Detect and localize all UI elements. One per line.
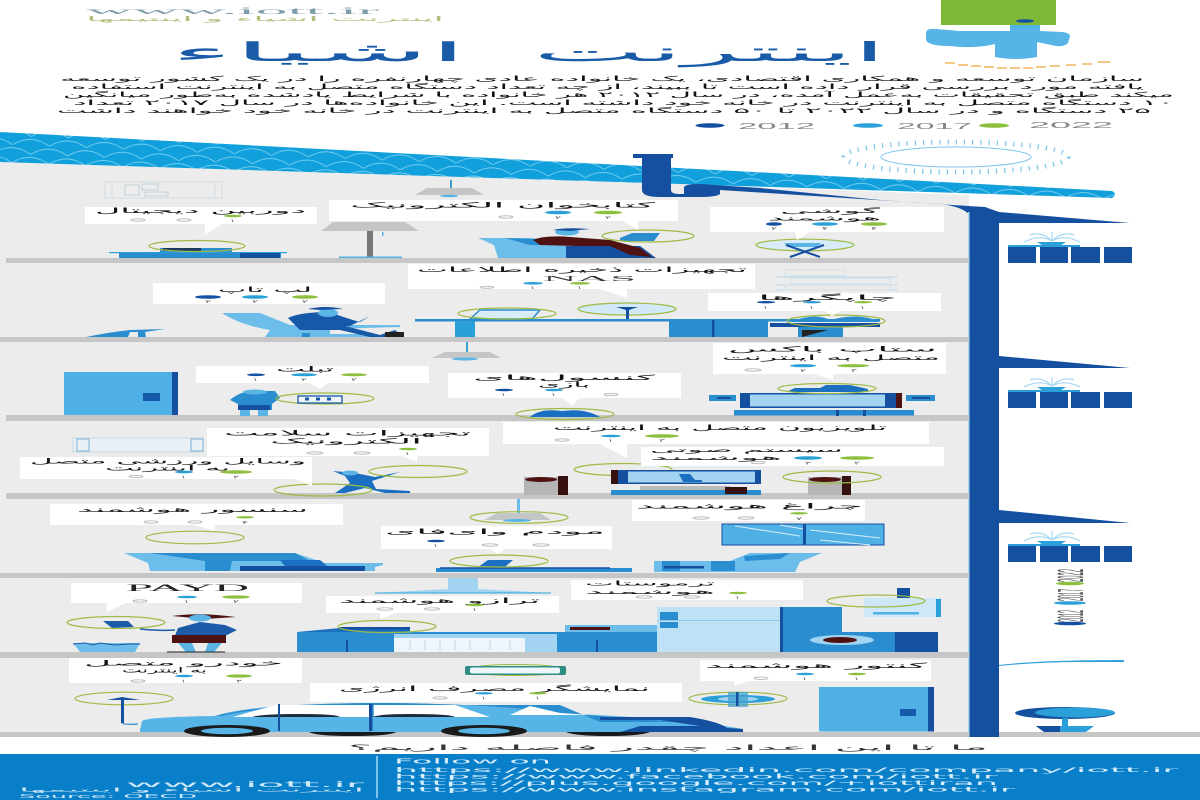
callout: e-health devices bbox=[207, 428, 489, 462]
legend: years bbox=[696, 121, 1116, 131]
callout: tablet: تبلت bbox=[276, 364, 334, 374]
callout: connected sports devices: به اینترنت bbox=[105, 464, 230, 472]
callout: digital camera bbox=[85, 206, 317, 235]
callout: energy consumption display: ۱ bbox=[481, 696, 486, 702]
callout: smart meter: ۱ bbox=[854, 677, 859, 682]
callout: smart audio system: سیستم صوتی bbox=[650, 446, 843, 454]
callout: connected sports devices: وسایل ورزشی متصل bbox=[30, 456, 306, 466]
callout: smartphone: گوشی bbox=[780, 207, 885, 215]
vertical legend: 2012 bbox=[1050, 610, 1091, 622]
callout: smart audio system: ۲ bbox=[805, 462, 812, 466]
callout: game consoles bbox=[448, 373, 681, 405]
callout: set-top box: ۳ bbox=[851, 368, 858, 374]
callout: smartphone: هوشمند bbox=[768, 214, 884, 222]
icon: EV charger bbox=[75, 692, 173, 724]
callout: smart meter bbox=[700, 660, 931, 686]
callout: e-book reader: ۲ bbox=[555, 216, 562, 221]
footer: social links bbox=[394, 758, 1180, 794]
callout: game consoles: ۱ bbox=[551, 393, 556, 398]
callout: smart scale bbox=[326, 596, 559, 619]
callout: PAYD: PAYD bbox=[126, 583, 252, 593]
callout: digital camera: دوربین دیجیتال bbox=[95, 206, 306, 215]
callout: tablet: ۲ bbox=[301, 378, 308, 383]
icon: woman with phone bbox=[67, 614, 237, 652]
legend: years: 2017 bbox=[897, 122, 974, 131]
callout: smart audio system bbox=[641, 446, 944, 466]
vertical legend bbox=[1050, 569, 1091, 625]
footer bbox=[0, 754, 1200, 800]
callout: smart scale: ۱ bbox=[472, 608, 477, 613]
callout: set-top box: ۲ bbox=[800, 369, 807, 374]
text: 2022 bbox=[1050, 569, 1091, 582]
footer: site and source: www.iott.ir bbox=[126, 780, 368, 789]
floor 3 furniture bbox=[64, 342, 935, 420]
footer: site and source: Source: OECD bbox=[19, 794, 197, 800]
callout: tablet bbox=[196, 364, 429, 389]
icon: car bbox=[140, 703, 743, 737]
legend: years: 2012 bbox=[738, 122, 817, 131]
callout: printer: ۱ bbox=[763, 306, 768, 311]
callout: laptop: ۲ bbox=[252, 300, 259, 305]
question heading: ما تا این اعداد چقدر فاصله داریم؟ bbox=[348, 743, 989, 752]
footer: site and source bbox=[19, 780, 368, 800]
icons: balcony plants bbox=[1008, 232, 1080, 546]
callout: smart thermostat bbox=[571, 580, 803, 601]
callout: connected car: ۲ bbox=[236, 680, 243, 684]
callout: printer bbox=[708, 293, 941, 316]
callout: connected TV: ۳ bbox=[659, 438, 666, 444]
drain pipe and gutter bbox=[633, 154, 999, 737]
intro paragraph: یافته مورد بررسی قرار داده است تا ببیند، از چه تعداد دستگاه متصل به اینترنت استفاده bbox=[71, 82, 1144, 91]
callout: smartphone: ۴ bbox=[822, 227, 829, 232]
callout: printer: ۱ bbox=[809, 306, 814, 311]
callout: smartphone: ۲ bbox=[771, 227, 778, 232]
header: site address bbox=[86, 6, 445, 23]
callout: connected car: به اینترنت bbox=[122, 666, 207, 674]
callout: connected car: خودرو متصل bbox=[84, 658, 283, 668]
callout: e-book reader: ۲ bbox=[605, 216, 612, 221]
callout: smart lamp bbox=[632, 500, 865, 522]
footer: social links: https://www.linkedin.com/company/iott.ir bbox=[394, 766, 1180, 774]
callout: printer: ۱ bbox=[860, 306, 865, 311]
callout: PAYD: ۱ bbox=[184, 600, 189, 605]
callout: laptop: ۲ bbox=[205, 300, 212, 305]
callout: connected car: ۱ bbox=[181, 680, 186, 684]
icon: hand holding green card bbox=[926, 0, 1110, 68]
callout: NAS storage: ۱ bbox=[530, 286, 535, 291]
callout: smart lamp: ۷ bbox=[796, 517, 803, 522]
callout: set-top box: ستاپ باکس bbox=[728, 344, 937, 354]
callout: connected TV: تلویزیون متصل به اینترنت bbox=[553, 423, 887, 432]
floor 5 furniture bbox=[124, 499, 884, 572]
intro paragraph: ۱۰ دستگاه متصل به اینترنت در خانه خود داشته است. این خانواده‌ها در سال ۲۰۱۷ تعداد bbox=[73, 98, 1174, 107]
intro paragraph: میکند طبق تحقیقات به‌عمل آمده، در سال ۲۰۱۲ هر خانواده با شرایط یادشده به‌طور میانگین bbox=[63, 90, 1175, 99]
callout: connected car bbox=[69, 658, 302, 684]
callout: connected sports devices bbox=[20, 456, 312, 486]
callout: smart meter: کنتور هوشمند bbox=[705, 661, 930, 670]
callout: PAYD: ۲ bbox=[233, 600, 240, 605]
callout: smart audio system: هوشمند bbox=[650, 454, 785, 462]
icon: folding table bbox=[756, 239, 854, 257]
callout: laptop bbox=[153, 283, 385, 305]
intro paragraph: ۲۵ دستگاه و در سال ۲۰۲۲ تا ۵۰ دستگاه متصل به اینترنت در خانه خود خواهند داشت bbox=[57, 106, 1152, 115]
callout: e-book reader bbox=[329, 200, 678, 230]
callout: e-health devices: الکترونیک bbox=[270, 436, 422, 446]
callout: smart sensor bbox=[50, 504, 343, 531]
callout: smart meter: ۱ bbox=[802, 677, 807, 682]
icon: sun bbox=[844, 142, 1068, 172]
callout: connected TV bbox=[503, 422, 929, 458]
callout: smart thermostat: ۱ bbox=[735, 596, 740, 601]
callout: e-health devices: تجهیزات سلامت bbox=[224, 428, 471, 438]
building wall bbox=[0, 158, 969, 737]
callout: game consoles: بازی bbox=[538, 380, 590, 389]
callout: smart thermostat: ترموستات bbox=[585, 580, 716, 588]
floor 6 furniture bbox=[297, 578, 941, 652]
callout: e-health devices: ۱ bbox=[405, 452, 410, 457]
callout: energy consumption display: نمایشگر مصرف انرژی bbox=[339, 684, 650, 693]
callout: NAS storage: NAS bbox=[543, 275, 637, 283]
intro paragraph bbox=[57, 75, 1175, 115]
callout: wifi modem: مودم وای‌فای bbox=[385, 527, 606, 536]
callout: laptop: لپ تاپ bbox=[218, 285, 312, 294]
callout: smart sensor: ۴ bbox=[242, 521, 249, 526]
footer: social links: https://www.instagram.com/iott.ir bbox=[394, 786, 1017, 794]
callout: energy consumption display: ۱ bbox=[535, 696, 540, 702]
floor 2 furniture bbox=[86, 270, 898, 337]
callout: connected TV: ۱ bbox=[608, 439, 613, 444]
callout: digital camera: ۱ bbox=[230, 219, 235, 224]
callout: smart scale: ترازو هوشمند bbox=[339, 596, 540, 605]
callout: PAYD bbox=[71, 583, 302, 612]
callout: NAS storage bbox=[408, 264, 755, 298]
roof bbox=[0, 132, 1115, 198]
header: site address: اینترنت اشیاء و اینتیمها bbox=[86, 15, 445, 23]
callout: printer: چاپگرها bbox=[758, 293, 897, 302]
icon: energy display bbox=[465, 664, 566, 676]
floors bbox=[0, 258, 1200, 737]
callout: tablet: ۱ bbox=[253, 378, 258, 383]
footer: social links: Follow on bbox=[394, 758, 551, 766]
callout: energy consumption display bbox=[310, 683, 682, 702]
footer: social links: https://www.facebook.com/iott.ir bbox=[394, 772, 1000, 780]
callout: smart sensor: سنسور هوشمند bbox=[77, 505, 308, 514]
callout: set-top box: متصل به اینترنت bbox=[722, 353, 941, 362]
callout: laptop: ۲ bbox=[302, 300, 309, 305]
callout: NAS storage: ۱ bbox=[577, 286, 582, 291]
title: اشیاء bbox=[170, 38, 467, 68]
callout: smart lamp: چراغ هوشمند bbox=[636, 502, 863, 510]
icon: garden tree bbox=[1015, 707, 1115, 732]
icon: person reading on sofa bbox=[478, 228, 694, 258]
callout: smartphone: ۴ bbox=[871, 227, 878, 232]
title bbox=[170, 38, 886, 68]
legend: years: 2022 bbox=[1029, 121, 1116, 130]
callout: connected sports devices: ۱ bbox=[181, 476, 186, 480]
balconies bbox=[999, 212, 1132, 562]
floor 4 furniture bbox=[73, 438, 881, 496]
intro paragraph: سازمان توسعه و همکاری اقتصادی، یک خانواده عادی چهارنفره را در یک کشور توسعه bbox=[60, 75, 1145, 83]
callout: wifi modem: ۱ bbox=[433, 544, 438, 549]
callout: smart audio system: ۳ bbox=[854, 460, 861, 466]
callout: smart thermostat: هوشمند bbox=[585, 588, 718, 596]
title: اینترنت bbox=[533, 38, 886, 68]
callout: tablet: ۲ bbox=[351, 378, 358, 383]
callout: NAS storage: تجهیزات ذخیره اطلاعات bbox=[417, 265, 747, 274]
callout: game consoles: ۱ bbox=[501, 393, 506, 398]
footer: social links: https://plus.google.com/+iottiran bbox=[394, 779, 998, 787]
floor 1 furniture bbox=[105, 180, 484, 258]
callout: smartphone bbox=[710, 207, 944, 240]
icon: garden lamp line bbox=[999, 660, 1124, 666]
callout: wifi modem bbox=[381, 526, 612, 554]
callout: connected sports devices: ۲ bbox=[233, 476, 240, 480]
text: 2017 bbox=[1050, 589, 1091, 601]
callout: e-book reader: کتابخوان الکترونیک bbox=[350, 200, 658, 210]
callout: game consoles: کنسول‌های bbox=[473, 373, 658, 382]
callout: set-top box bbox=[713, 343, 946, 380]
icon: smart meter and door bbox=[689, 687, 934, 732]
footer: site and source: اینترنت اشیاء و اینتیمها bbox=[19, 788, 364, 794]
header: site address: www.iott.ir bbox=[86, 6, 379, 16]
